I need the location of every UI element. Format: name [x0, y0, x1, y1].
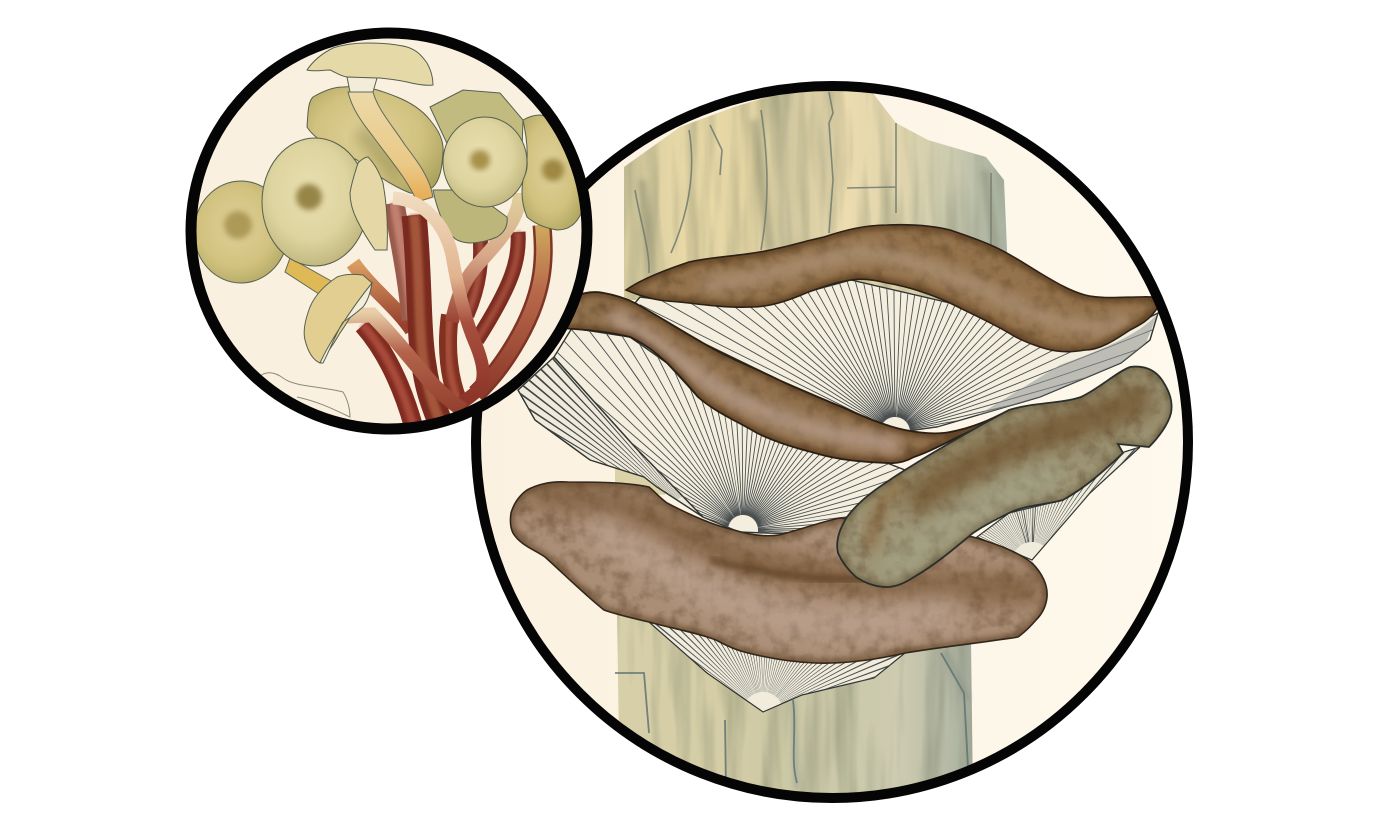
cap left centre — [262, 138, 368, 266]
back cap centre — [307, 87, 443, 193]
illustration: two circular mushroom vignettes — [186, 28, 1193, 803]
yellow stem lower left — [285, 258, 333, 296]
right cap — [837, 367, 1172, 587]
top cap — [626, 225, 1158, 352]
right lower gills — [976, 446, 1140, 561]
top small cap — [307, 43, 433, 92]
tree trunk middle — [615, 468, 665, 495]
top gills fan — [635, 280, 1158, 431]
bottom cap — [510, 482, 1047, 663]
far left gills — [517, 356, 703, 518]
red stems cluster — [353, 203, 543, 428]
back right cap — [430, 90, 523, 150]
lower side cap with gills — [304, 274, 372, 363]
tree trunk upper — [624, 80, 1007, 300]
small circle paper background — [191, 33, 587, 429]
large circle outline — [476, 86, 1188, 798]
cap far left — [194, 181, 288, 283]
middle gills fan — [553, 330, 905, 534]
yellow-orange stem from top cap — [348, 92, 433, 202]
second cap — [560, 292, 1009, 463]
small circle: clustered yellow-capped mushrooms — [191, 33, 587, 429]
large circle: oyster mushrooms on a trunk — [476, 80, 1188, 810]
cap back shading — [360, 130, 400, 175]
bottom gills — [648, 622, 906, 713]
sketch lines lower left — [258, 373, 350, 417]
large circle paper background — [476, 86, 1188, 798]
pale right stem — [452, 193, 520, 322]
small circle outline — [191, 33, 587, 429]
small side cap — [350, 157, 387, 250]
cap far right — [522, 115, 585, 230]
cap centre right underside — [433, 190, 507, 243]
cap centre right — [443, 117, 527, 207]
lower cap stem — [345, 315, 463, 410]
tree trunk lower — [615, 615, 972, 793]
pale curved stem — [393, 198, 483, 404]
